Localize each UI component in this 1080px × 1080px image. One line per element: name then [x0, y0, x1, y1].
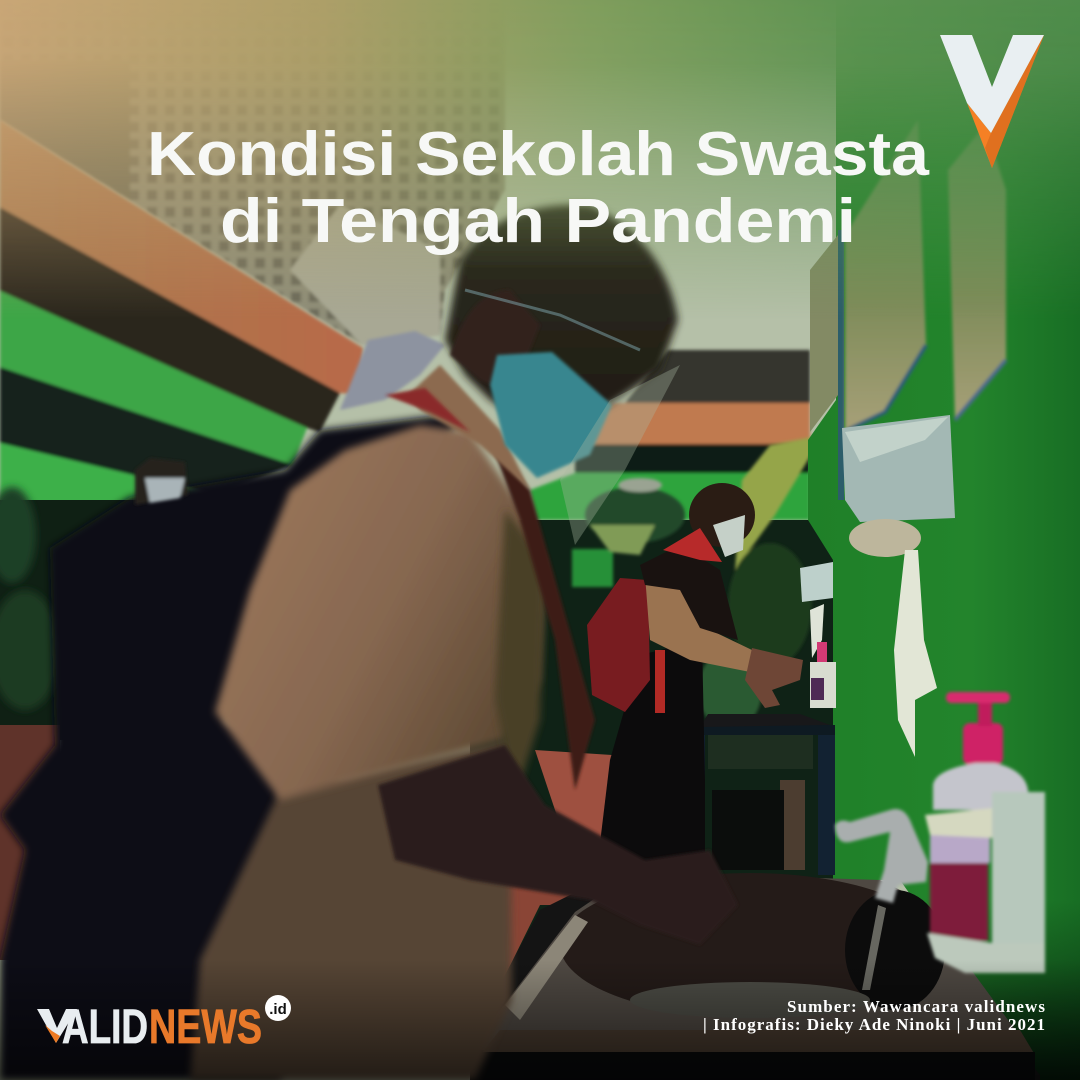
head [445, 205, 678, 430]
student: foreground figure [0, 331, 738, 1080]
shirt upper and sleeve [215, 425, 545, 800]
icon: Validnews V logo [940, 35, 1044, 168]
backpack [0, 412, 468, 1080]
dark ground behind main sink [470, 880, 1040, 1080]
rear sink table [695, 714, 835, 875]
source credit [703, 997, 1045, 1034]
glasses [465, 290, 640, 350]
garden and ground behind figures [0, 487, 836, 1080]
small dispenser and bottle [800, 562, 836, 708]
title: di Tengah Pandemi [220, 187, 856, 256]
collar [408, 365, 530, 490]
hijab of student behind [340, 331, 445, 410]
faucet [835, 809, 928, 903]
building: rear block with roof [530, 350, 810, 520]
source credit: Sumber: Wawancara validnews [787, 997, 1045, 1016]
ear [450, 290, 540, 395]
plants [585, 435, 823, 730]
student far left [135, 458, 188, 505]
scarf [490, 440, 595, 790]
forearm and hands [378, 745, 738, 945]
logo: VALIDNEWS.id: NEWS [149, 1001, 262, 1054]
logo: VALIDNEWS.id [37, 995, 291, 1054]
title [147, 120, 930, 256]
vignette bottom [0, 960, 1080, 1080]
building: high-rise tower [0, 0, 505, 345]
face mask [490, 352, 612, 478]
soap dispenser [925, 692, 1045, 973]
green wall [808, 0, 1080, 1080]
student head above veil [445, 205, 680, 545]
title: Kondisi Sekolah Swasta [147, 120, 930, 189]
logo: VALIDNEWS.id: .id [269, 1001, 287, 1018]
shirt lower [190, 740, 512, 1080]
logo: VALIDNEWS.id: ALID [62, 1001, 148, 1054]
source credit: | Infografis: Dieky Ade Ninoki | Juni 2021 [703, 1015, 1045, 1034]
top colour veil [0, 0, 1080, 320]
face shield [560, 365, 680, 545]
main sink [470, 873, 1035, 1080]
neck scarf white and red [385, 388, 470, 432]
wall mirrors [845, 120, 1006, 430]
student: girl in background [587, 483, 803, 865]
building: left school block [0, 120, 363, 532]
tissue dispenser [842, 415, 955, 757]
shirt right olive side [495, 510, 545, 800]
